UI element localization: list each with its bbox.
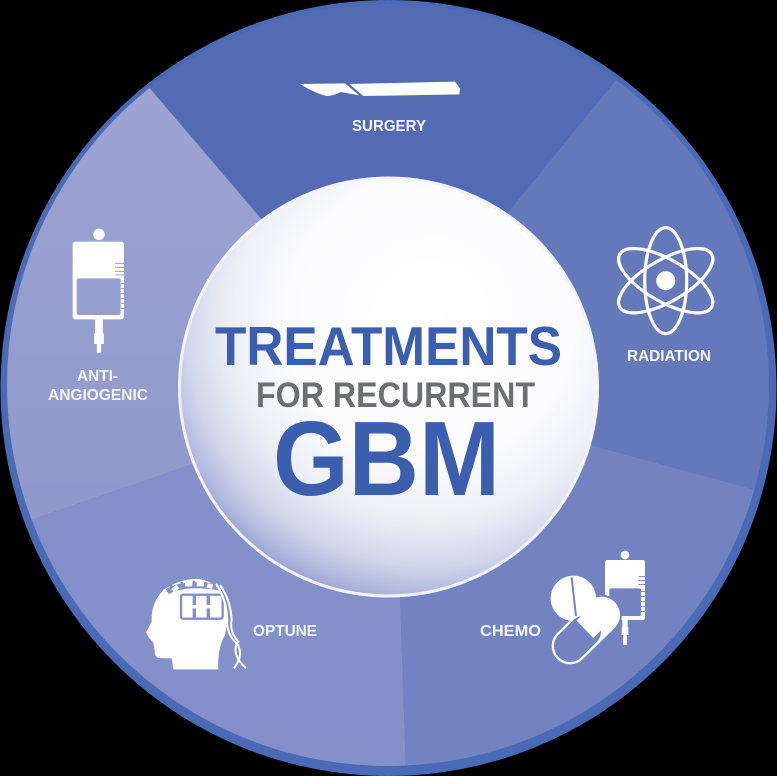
icon: head with optune array	[146, 579, 246, 669]
segment: surgery	[150, 4, 616, 218]
segment: optune	[32, 464, 406, 766]
segment: radiation	[508, 80, 769, 490]
label: anti-angiogenic: ANTI-	[77, 368, 118, 385]
icon: iv bag	[73, 229, 124, 353]
label: chemo: CHEMO	[480, 623, 541, 640]
subtitle: for recurrent: FOR RECURRENT	[256, 376, 535, 415]
icon: atom	[609, 228, 722, 334]
label: anti-angiogenic	[48, 368, 148, 404]
title: GBM: GBM	[273, 400, 500, 518]
segment: chemo	[400, 446, 754, 766]
center circle	[180, 178, 598, 596]
icon: pills and iv bag	[551, 551, 645, 646]
label: surgery: SURGERY	[352, 118, 426, 135]
label: radiation: RADIATION	[627, 348, 711, 365]
icon: scalpel	[300, 82, 460, 96]
label: anti-angiogenic: ANGIOGENIC	[48, 387, 148, 404]
label: optune: OPTUNE	[253, 623, 317, 640]
segment: anti-angiogenic	[7, 88, 262, 520]
title: treatments: TREATMENTS	[215, 315, 562, 377]
